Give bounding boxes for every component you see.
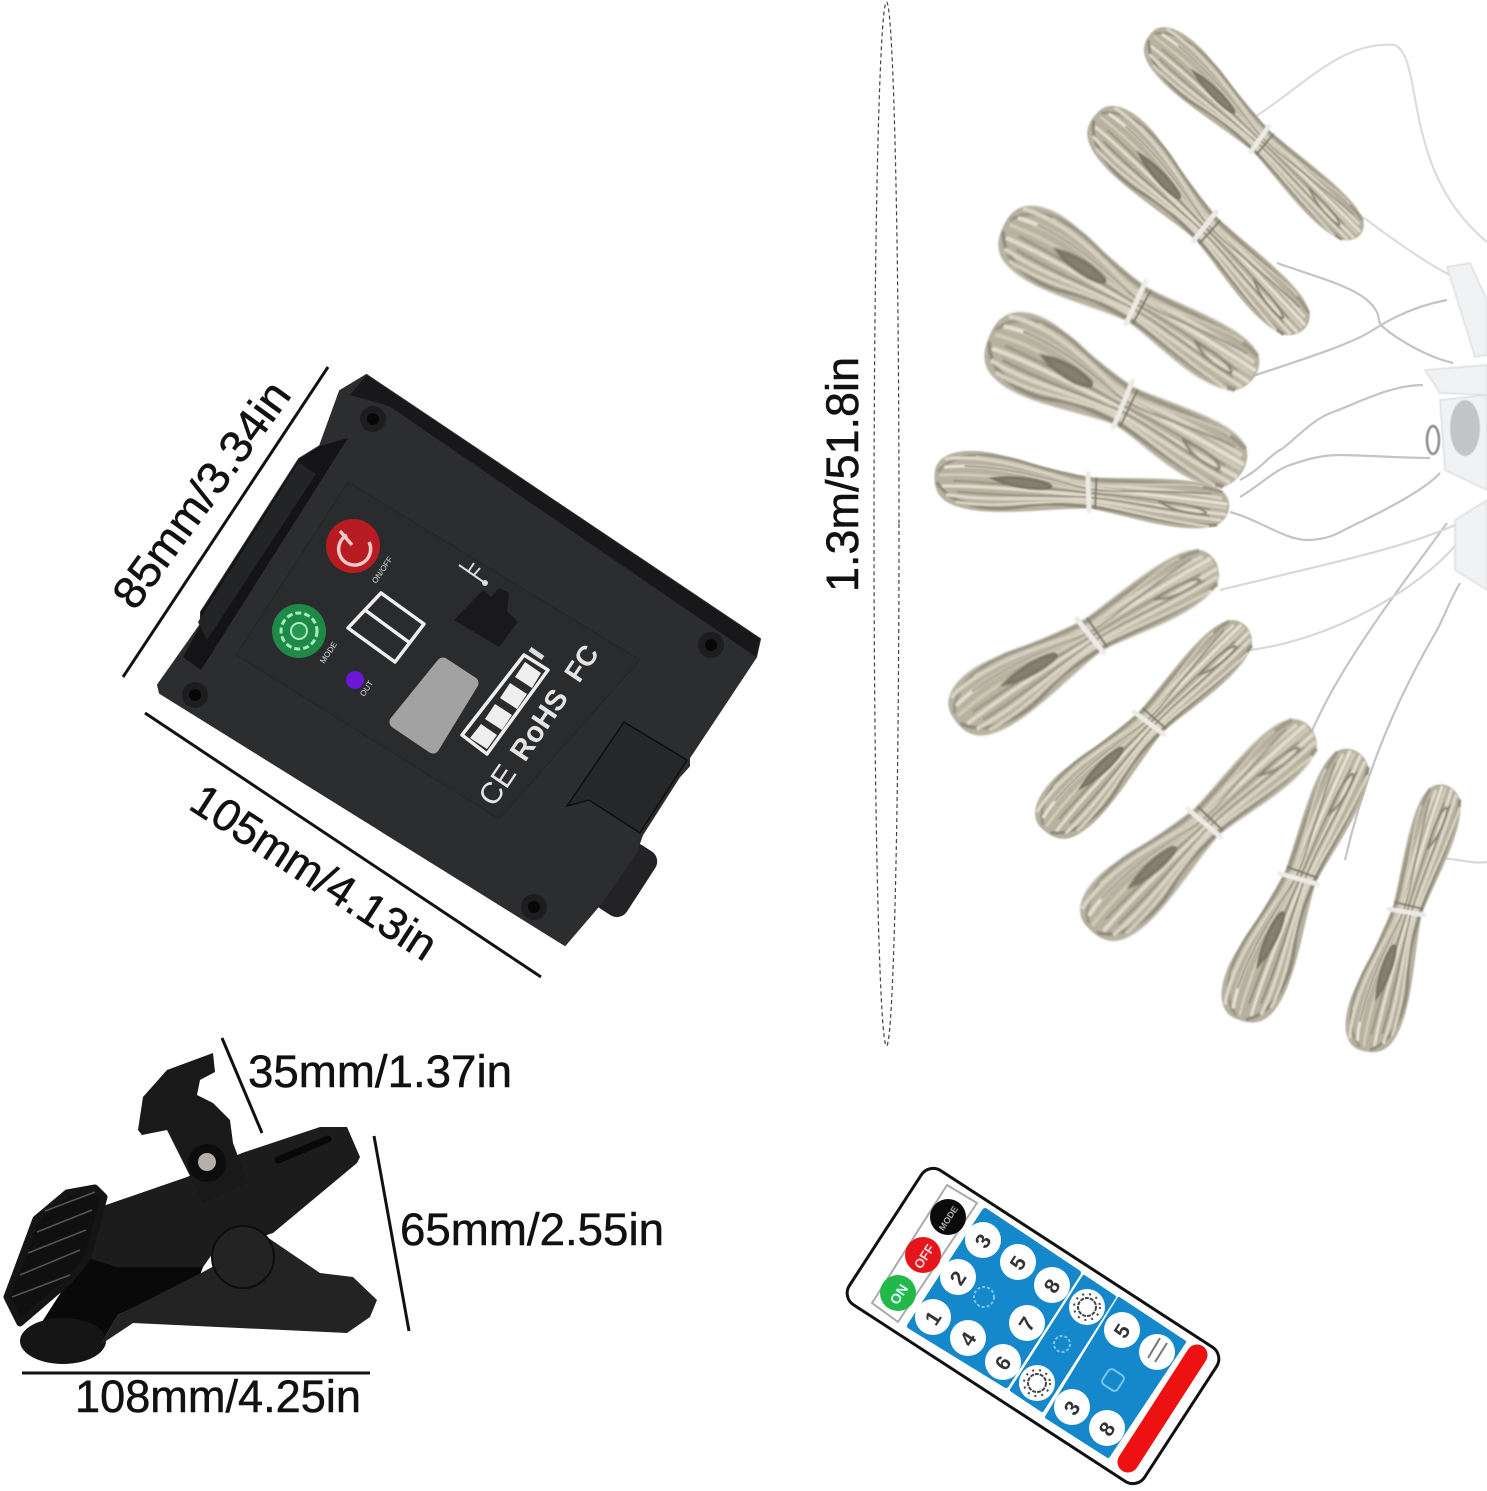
wire bundle 10 (1337, 777, 1473, 1060)
controller box (158, 375, 760, 945)
wire bundle 9 (1211, 738, 1383, 1032)
button numerals: 8 (1095, 1418, 1121, 1441)
wire bundle 8 (1067, 701, 1332, 955)
usb socket (454, 588, 518, 647)
button numerals: 5 (1110, 1320, 1136, 1343)
on button: ON (886, 1281, 911, 1307)
front panel (236, 482, 640, 819)
button numerals: 7 (1015, 1313, 1040, 1336)
label: CE: CE (472, 759, 523, 812)
button numerals: 8 (1040, 1275, 1066, 1298)
blue panel: colours (910, 1211, 1078, 1385)
panel icons (974, 1287, 1125, 1392)
screw 3 (182, 682, 208, 708)
label: 105mm/4.13in: 105mm/4.13in (182, 774, 447, 971)
off button: OFF (911, 1242, 938, 1272)
button numerals (921, 1230, 1136, 1441)
remote body (842, 1163, 1224, 1489)
wire bundle 2 (1074, 94, 1326, 350)
label: 65mm/2.55in: 65mm/2.55in (400, 1204, 664, 1255)
label: 108mm/4.25in: 108mm/4.25in (75, 1371, 361, 1422)
mode button: MODE (937, 1204, 960, 1232)
label: mode: MODE (318, 640, 339, 665)
power button box (872, 1185, 977, 1322)
handle (7, 1188, 104, 1323)
dashed length ellipse (874, 2, 899, 1046)
timer button icon (1148, 1338, 1167, 1362)
dimension line: clip length (22, 1372, 370, 1374)
wire bundle 3 (985, 193, 1275, 407)
mount shoe and arm (138, 1053, 248, 1203)
wire connectors hub (1425, 263, 1487, 590)
mode button (272, 604, 326, 658)
dimension line: controller height (123, 367, 328, 677)
label: RoHS: RoHS (504, 684, 575, 767)
screen (396, 664, 472, 747)
button numerals: 3 (1060, 1397, 1085, 1420)
side rail (198, 462, 316, 640)
button numerals: 5 (1006, 1252, 1032, 1275)
seven segment display (348, 593, 424, 662)
blue panel: brightness (1012, 1277, 1114, 1410)
lower jaw (100, 1237, 377, 1345)
number buttons (915, 1222, 1175, 1446)
button numerals: 6 (991, 1352, 1016, 1375)
label: FC: FC (558, 639, 605, 687)
screw 1 (360, 406, 386, 432)
mode button (930, 1199, 966, 1235)
wire bundle 5 (931, 447, 1232, 537)
dimension line: clip height (374, 1136, 409, 1331)
dc port cover (567, 722, 687, 833)
clip (7, 1053, 377, 1364)
bottom cylinder (20, 1318, 106, 1364)
screw 4 (521, 894, 547, 920)
dimension line: controller width (145, 713, 541, 977)
button numerals: 4 (956, 1328, 982, 1351)
side slot (183, 438, 348, 670)
label: on/off: ON/OFF (370, 555, 395, 585)
button numerals: 1 (921, 1307, 947, 1330)
on button (880, 1275, 916, 1311)
wire bundle 6 (937, 531, 1233, 749)
status light (346, 671, 364, 689)
wire bundle 4 (971, 299, 1262, 504)
wire bundle 7 (1023, 604, 1266, 852)
label: 85mm/3.34in: 85mm/3.34in (102, 371, 301, 618)
body (158, 375, 760, 945)
screw 2 (698, 632, 724, 658)
spring wedge (40, 1255, 205, 1345)
pivot (212, 1226, 274, 1288)
button numerals: 3 (971, 1230, 996, 1253)
remote control (842, 1163, 1224, 1489)
red warning strip (1128, 1355, 1197, 1462)
jaw slot (278, 1139, 328, 1160)
blue panel: timer (1047, 1299, 1184, 1456)
gear button icons (1024, 1294, 1100, 1396)
power button (326, 519, 380, 573)
label: out: OUT (358, 679, 375, 698)
usb icon (459, 563, 487, 585)
wire bundle 1 (1132, 16, 1378, 253)
off button (905, 1237, 941, 1273)
button numerals: 2 (946, 1267, 971, 1290)
label: 1.3m/51.8in: 1.3m/51.8in (817, 357, 868, 592)
dimension line: shoe (222, 1038, 262, 1133)
handle ridges (12, 1192, 95, 1297)
thin connecting wires (1220, 45, 1487, 863)
upper jaw (85, 1127, 360, 1267)
battery icon (462, 649, 548, 754)
top bevel (350, 375, 760, 657)
bolt (188, 1144, 226, 1182)
label: 35mm/1.37in: 35mm/1.37in (248, 1046, 512, 1097)
output knob (590, 838, 662, 922)
